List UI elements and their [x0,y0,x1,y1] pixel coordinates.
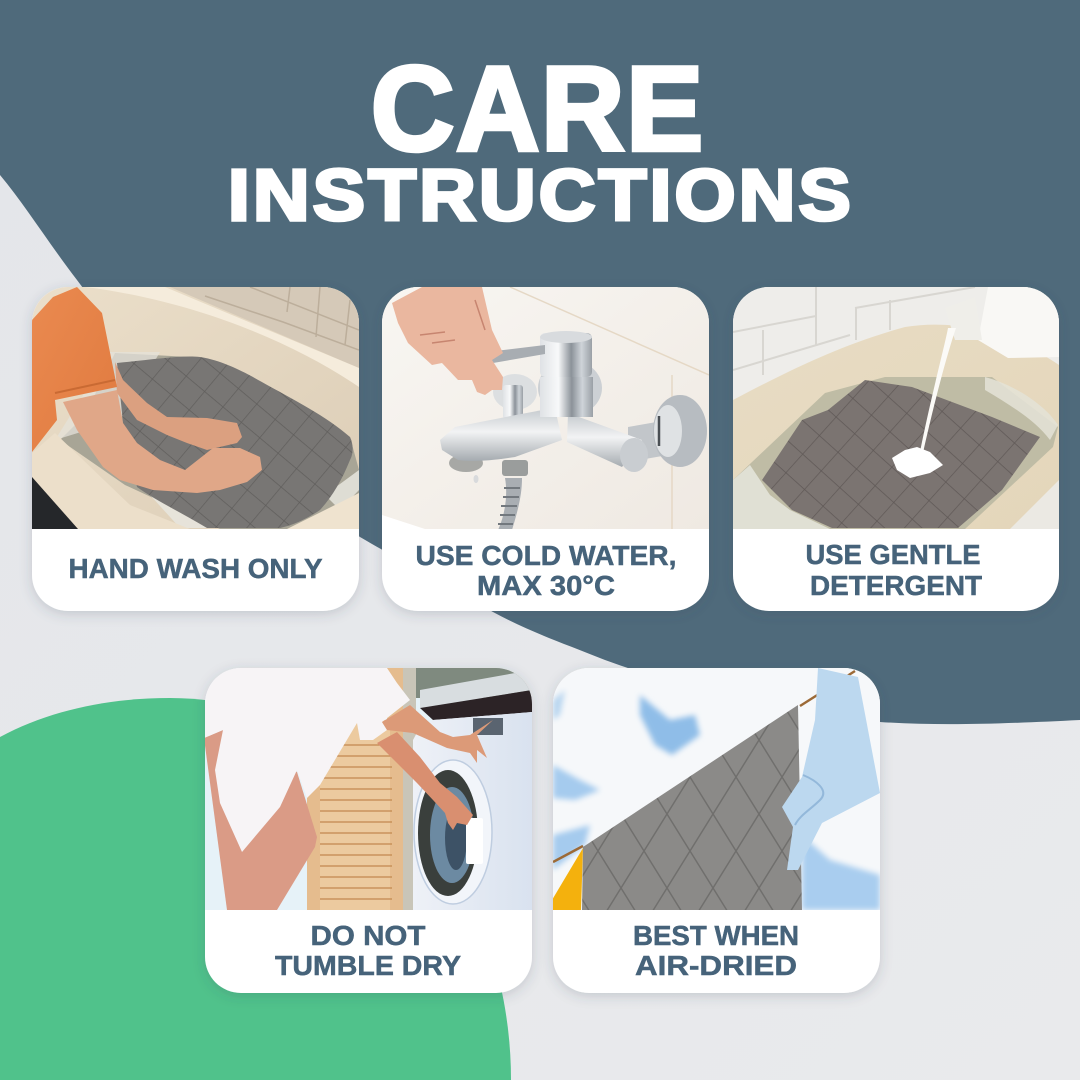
label [275,920,461,981]
card: do not tumble dry [204,668,532,993]
teal curved header shape [0,0,1080,724]
photo: chrome faucet and hand [382,287,709,530]
label: DETERGENT [810,570,982,601]
label: BEST WHEN [633,920,799,951]
title: INSTRUCTIONS [228,156,854,236]
photo: hands washing pad in tub [32,287,359,529]
label: HAND WASH ONLY [68,553,323,584]
label: USE GENTLE [806,539,980,570]
label: AIR-DRIED [635,950,797,981]
label: DO NOT [310,920,426,951]
green circle shape [0,698,511,1080]
title: CARE [371,42,705,176]
card: air dried [552,668,880,993]
photo: detergent poured on pad [733,287,1059,529]
title [228,42,854,236]
card: gentle detergent [733,287,1059,611]
label: MAX 30°C [477,570,615,601]
photo: pad on clothesline [552,668,880,910]
card: hand wash only [32,287,359,611]
label [806,539,982,601]
label: TUMBLE DRY [275,950,461,981]
label [416,540,676,601]
card: cold water [382,287,709,611]
label: USE COLD WATER, [416,540,676,571]
photo: person at washing machine [204,668,532,910]
label [633,920,799,981]
